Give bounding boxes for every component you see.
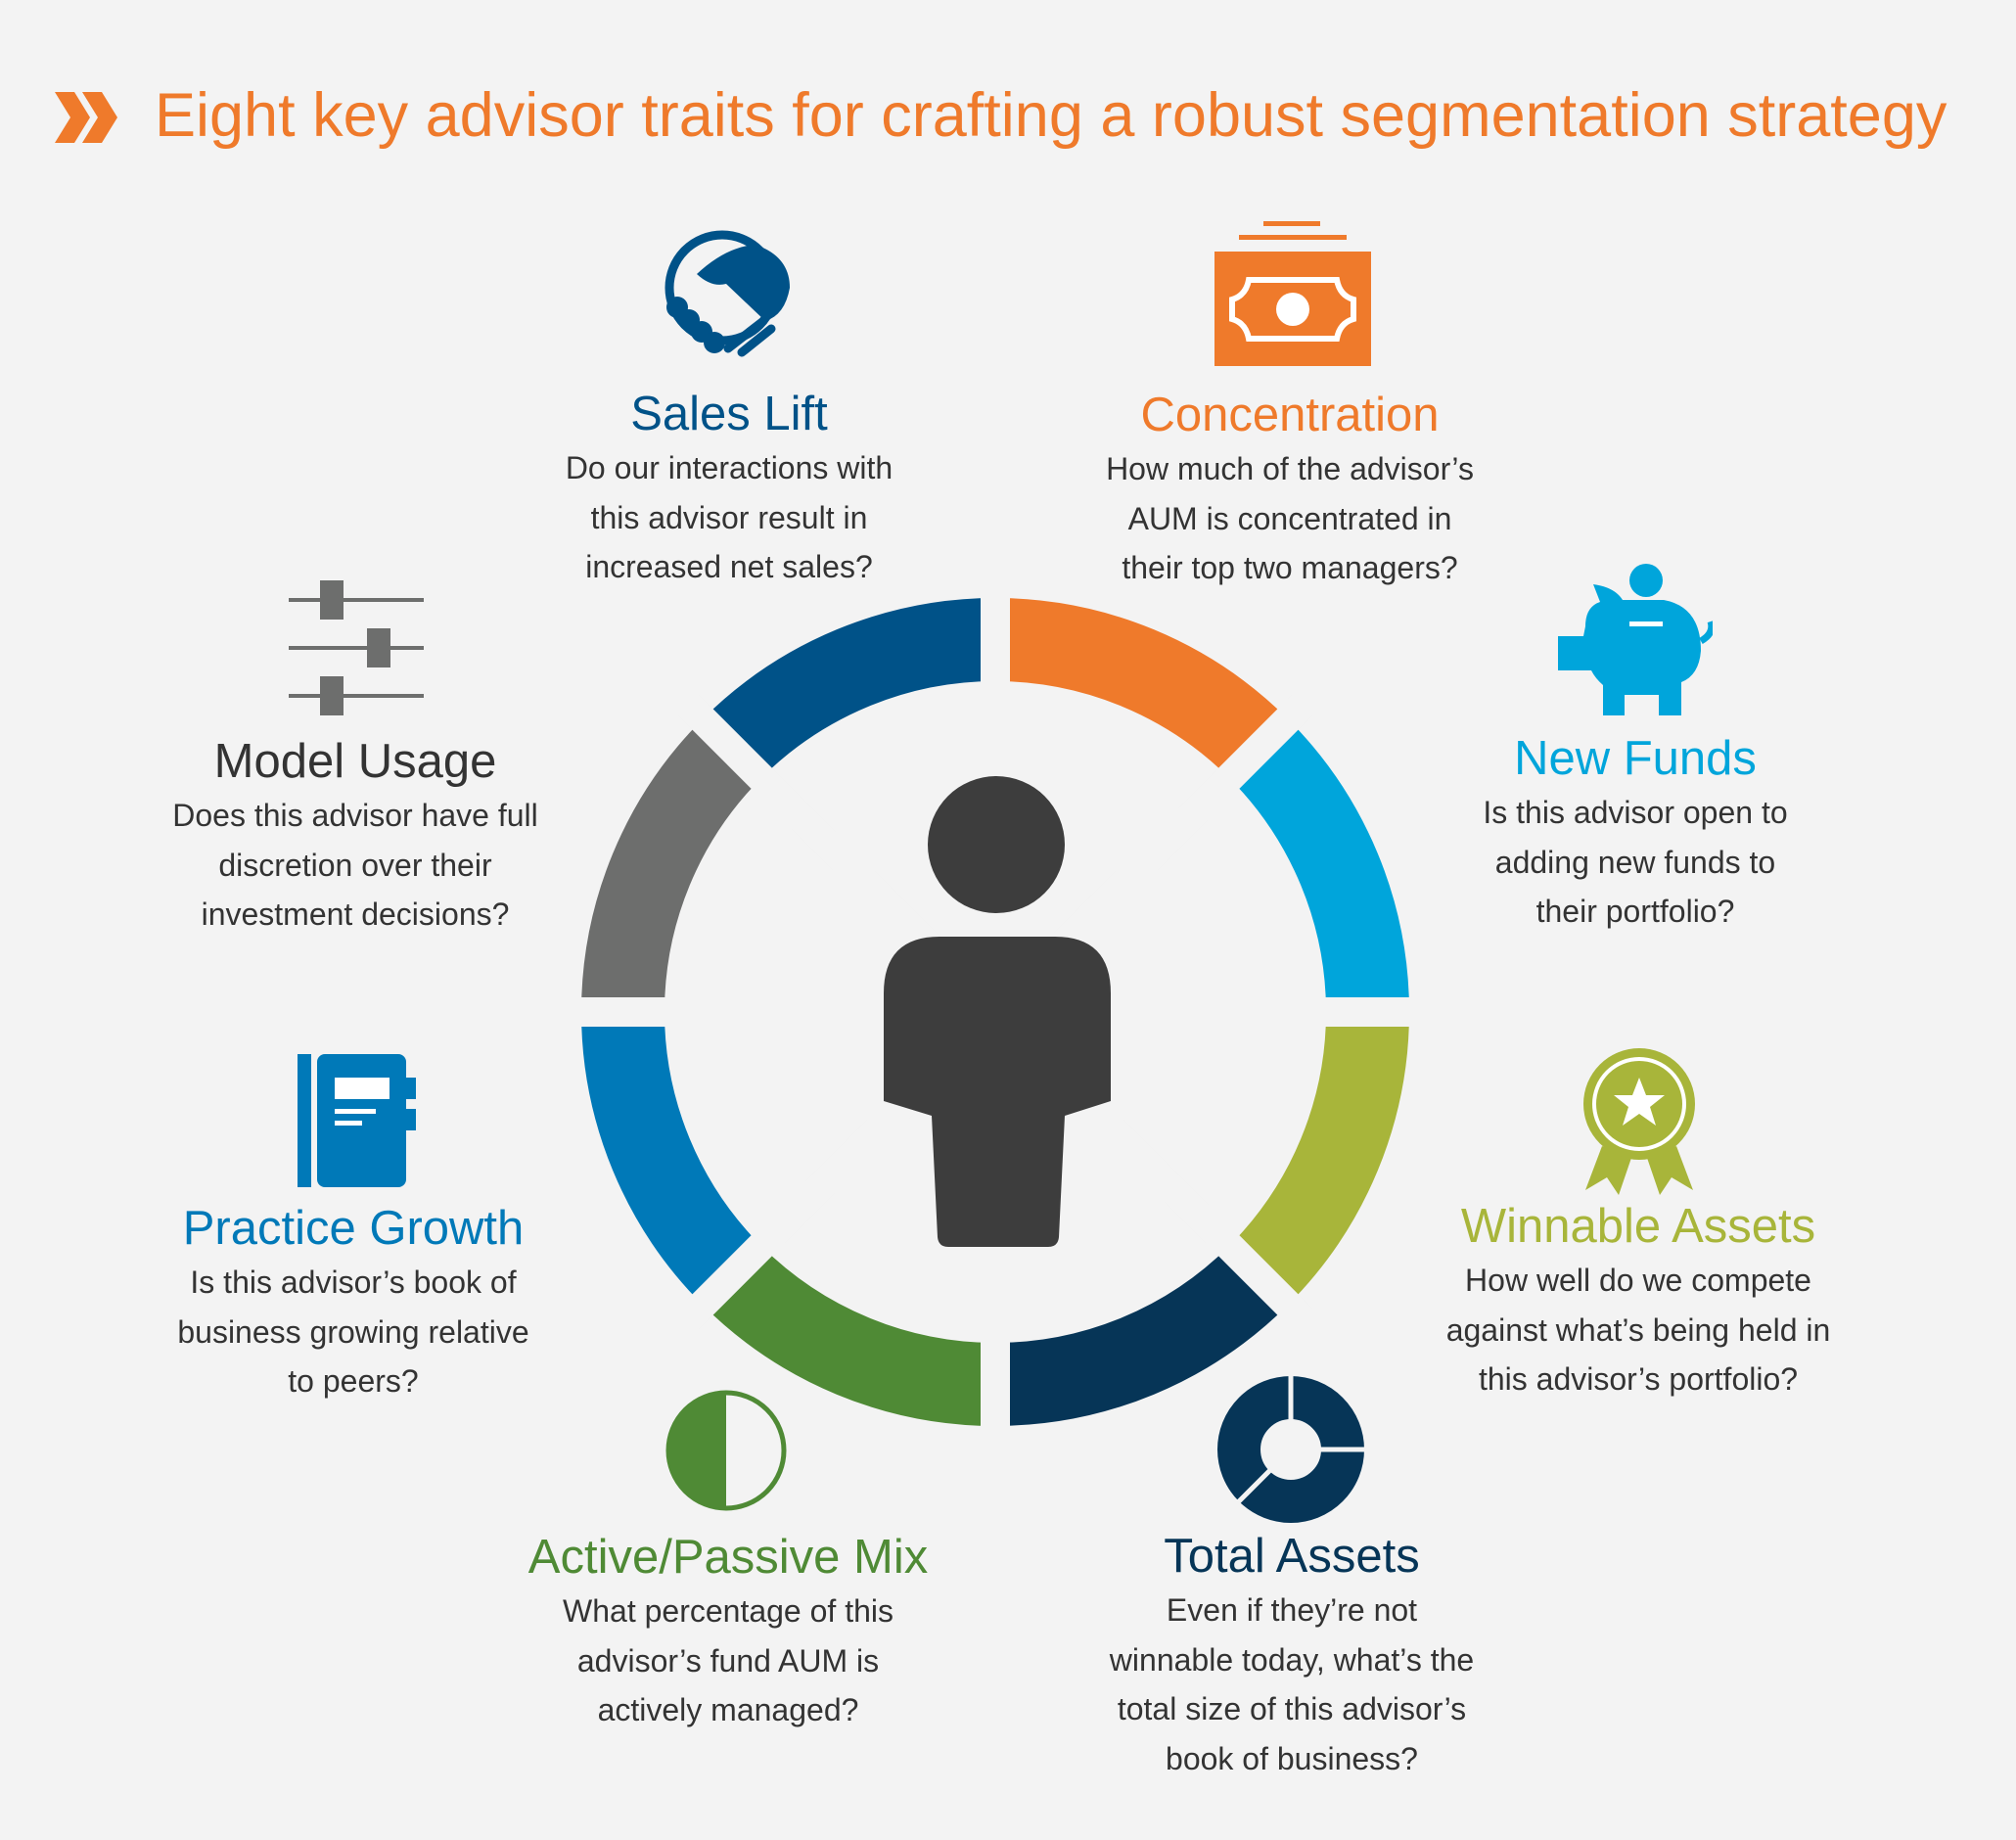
text: concentration: How much of the advisor’s <box>1106 451 1474 486</box>
icon: notebook <box>298 1054 416 1187</box>
text: active passive mix <box>528 1531 928 1727</box>
text: new funds: Is this advisor open to <box>1483 795 1788 830</box>
text: active passive mix: Active/Passive Mix <box>528 1531 928 1584</box>
text: new funds: their portfolio? <box>1536 894 1734 929</box>
text: model usage: Model Usage <box>214 735 496 788</box>
icon: donut <box>1217 1376 1364 1523</box>
text: sales lift: Do our interactions with <box>566 450 893 485</box>
text: new funds: adding new funds to <box>1495 844 1775 879</box>
icon: money <box>1214 221 1371 366</box>
text: winnable assets: against what’s being held in <box>1446 1311 1830 1347</box>
text: practice growth <box>177 1202 529 1399</box>
icon: half circle <box>665 1390 787 1511</box>
text: winnable assets: this advisor’s portfolio? <box>1479 1361 1798 1397</box>
text: concentration <box>1106 389 1474 585</box>
text: total assets <box>1110 1530 1474 1775</box>
text: practice growth: business growing relative <box>177 1313 529 1349</box>
title: Eight key advisor traits for crafting a robust segmentation strategy <box>155 81 1947 150</box>
text: active passive mix: What percentage of this <box>563 1593 893 1629</box>
text: new funds: New Funds <box>1514 732 1757 785</box>
icon: chevrons <box>55 92 117 143</box>
text: sales lift: Sales Lift <box>630 388 828 440</box>
text: model usage: Does this advisor have full <box>172 798 538 833</box>
text: total assets: winnable today, what’s the <box>1110 1642 1474 1678</box>
text: total assets: Even if they’re not <box>1167 1592 1417 1628</box>
icon: handshake <box>665 231 790 356</box>
text: new funds <box>1483 732 1788 929</box>
text: model usage <box>172 735 538 932</box>
text: model usage: discretion over their <box>218 848 492 883</box>
icon: award <box>1583 1048 1695 1195</box>
text: winnable assets: How well do we compete <box>1465 1263 1811 1298</box>
icon: piggy bank <box>1558 564 1713 715</box>
text: active passive mix: advisor’s fund AUM is <box>577 1642 879 1678</box>
text: concentration: their top two managers? <box>1122 550 1458 585</box>
text: practice growth: Practice Growth <box>183 1202 524 1255</box>
text: concentration: Concentration <box>1140 389 1440 441</box>
text: total assets: Total Assets <box>1164 1530 1420 1583</box>
text: winnable assets <box>1446 1200 1830 1397</box>
text: practice growth: to peers? <box>288 1363 419 1399</box>
text: winnable assets: Winnable Assets <box>1461 1200 1815 1253</box>
text: sales lift <box>566 388 893 584</box>
text: concentration: AUM is concentrated in <box>1128 501 1451 536</box>
text: total assets: total size of this advisor’s <box>1118 1691 1466 1726</box>
text: sales lift: increased net sales? <box>585 549 873 584</box>
text: sales lift: this advisor result in <box>591 499 867 534</box>
icon: person <box>884 776 1111 1247</box>
text: practice growth: Is this advisor’s book of <box>190 1265 517 1300</box>
text: total assets: book of business? <box>1166 1740 1418 1775</box>
text: model usage: investment decisions? <box>202 897 509 932</box>
icon: sliders <box>289 580 424 715</box>
text: active passive mix: actively managed? <box>598 1692 858 1727</box>
